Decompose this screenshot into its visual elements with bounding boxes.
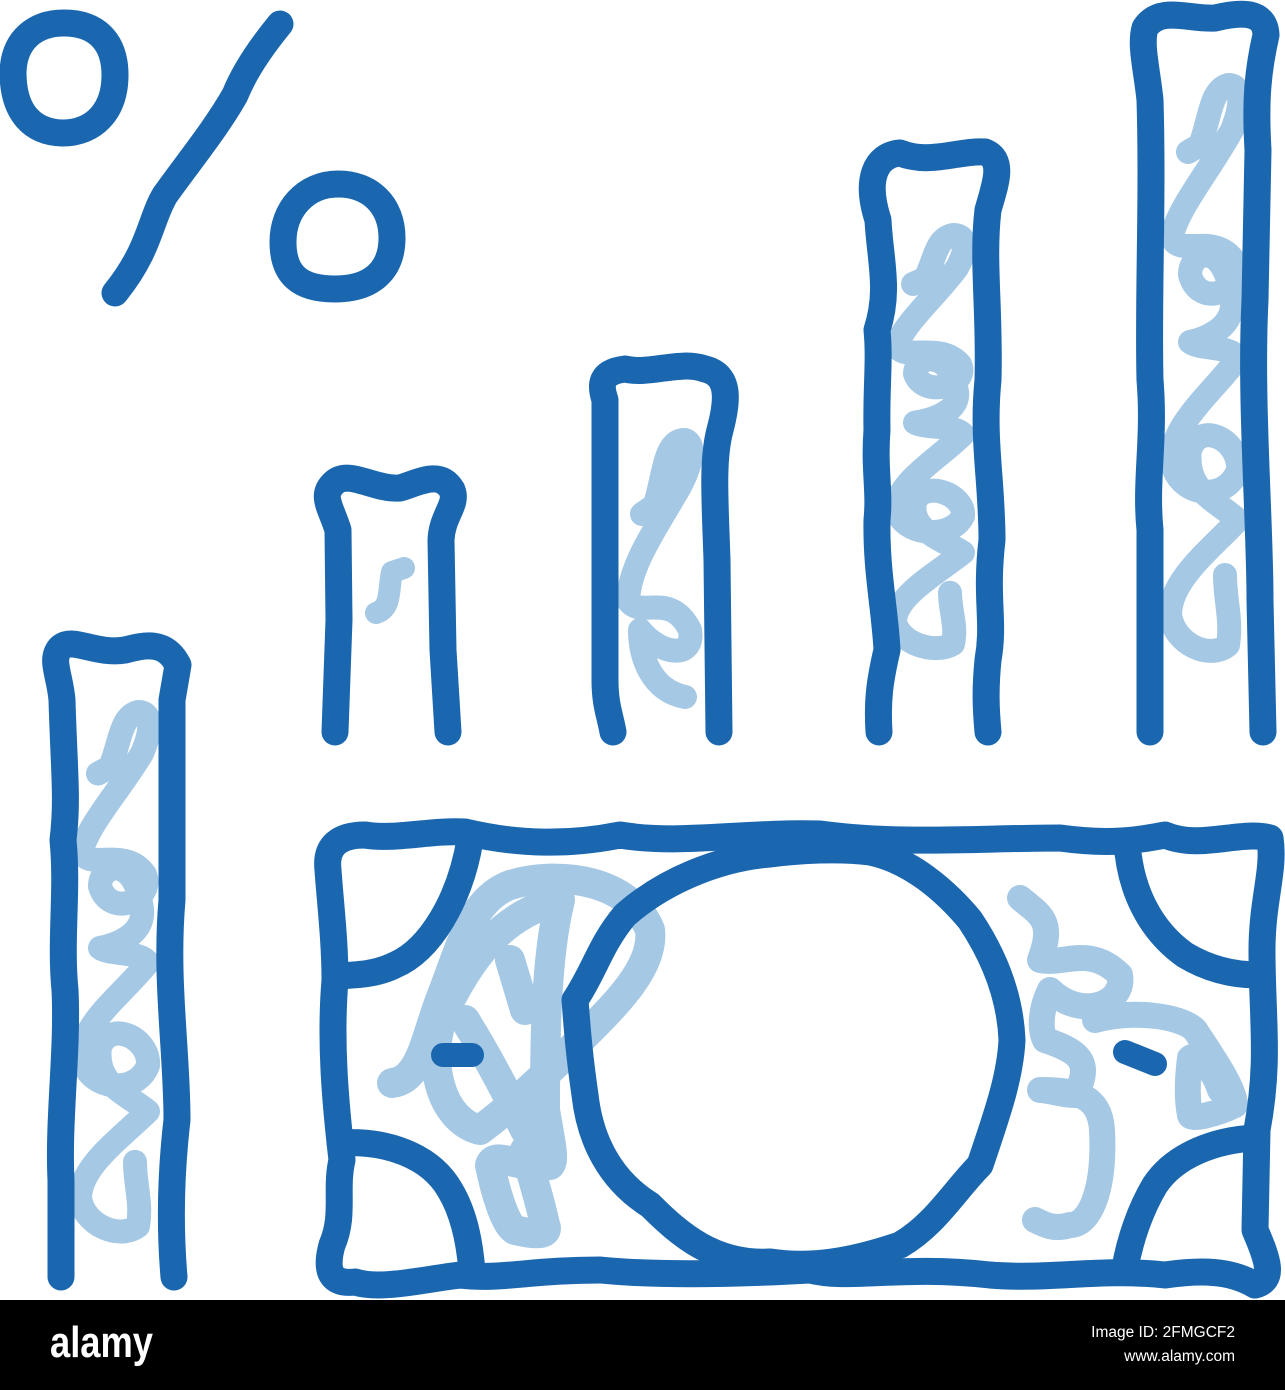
note centre circle [575,850,1012,1264]
banknote [328,832,1271,1285]
scribble: bar 5 [1170,85,1239,651]
bar 1 [56,644,178,1277]
scribble: bar 1 [80,712,149,1232]
note corner arcs [335,840,470,976]
scribble: note left [392,879,650,1233]
bar 4 [872,152,997,732]
scribble: bar 3 [628,440,691,697]
scribble: note right [1020,898,1235,1227]
scribble: bar 2 [376,568,404,613]
light blue scribble shading [80,85,1239,1233]
footer bar [0,1300,1285,1390]
icon: percent sign [13,23,392,293]
note dashes [443,1043,472,1067]
scribble: bar 4 [895,235,964,648]
footer website: www.alamy.com [1123,1348,1235,1365]
bar 2 [327,478,453,732]
bar 3 [602,366,725,732]
footer logo: alamy [50,1318,153,1367]
footer image id: Image ID: 2FMGCF2 [1091,1324,1235,1341]
bar 5 [1143,14,1266,732]
